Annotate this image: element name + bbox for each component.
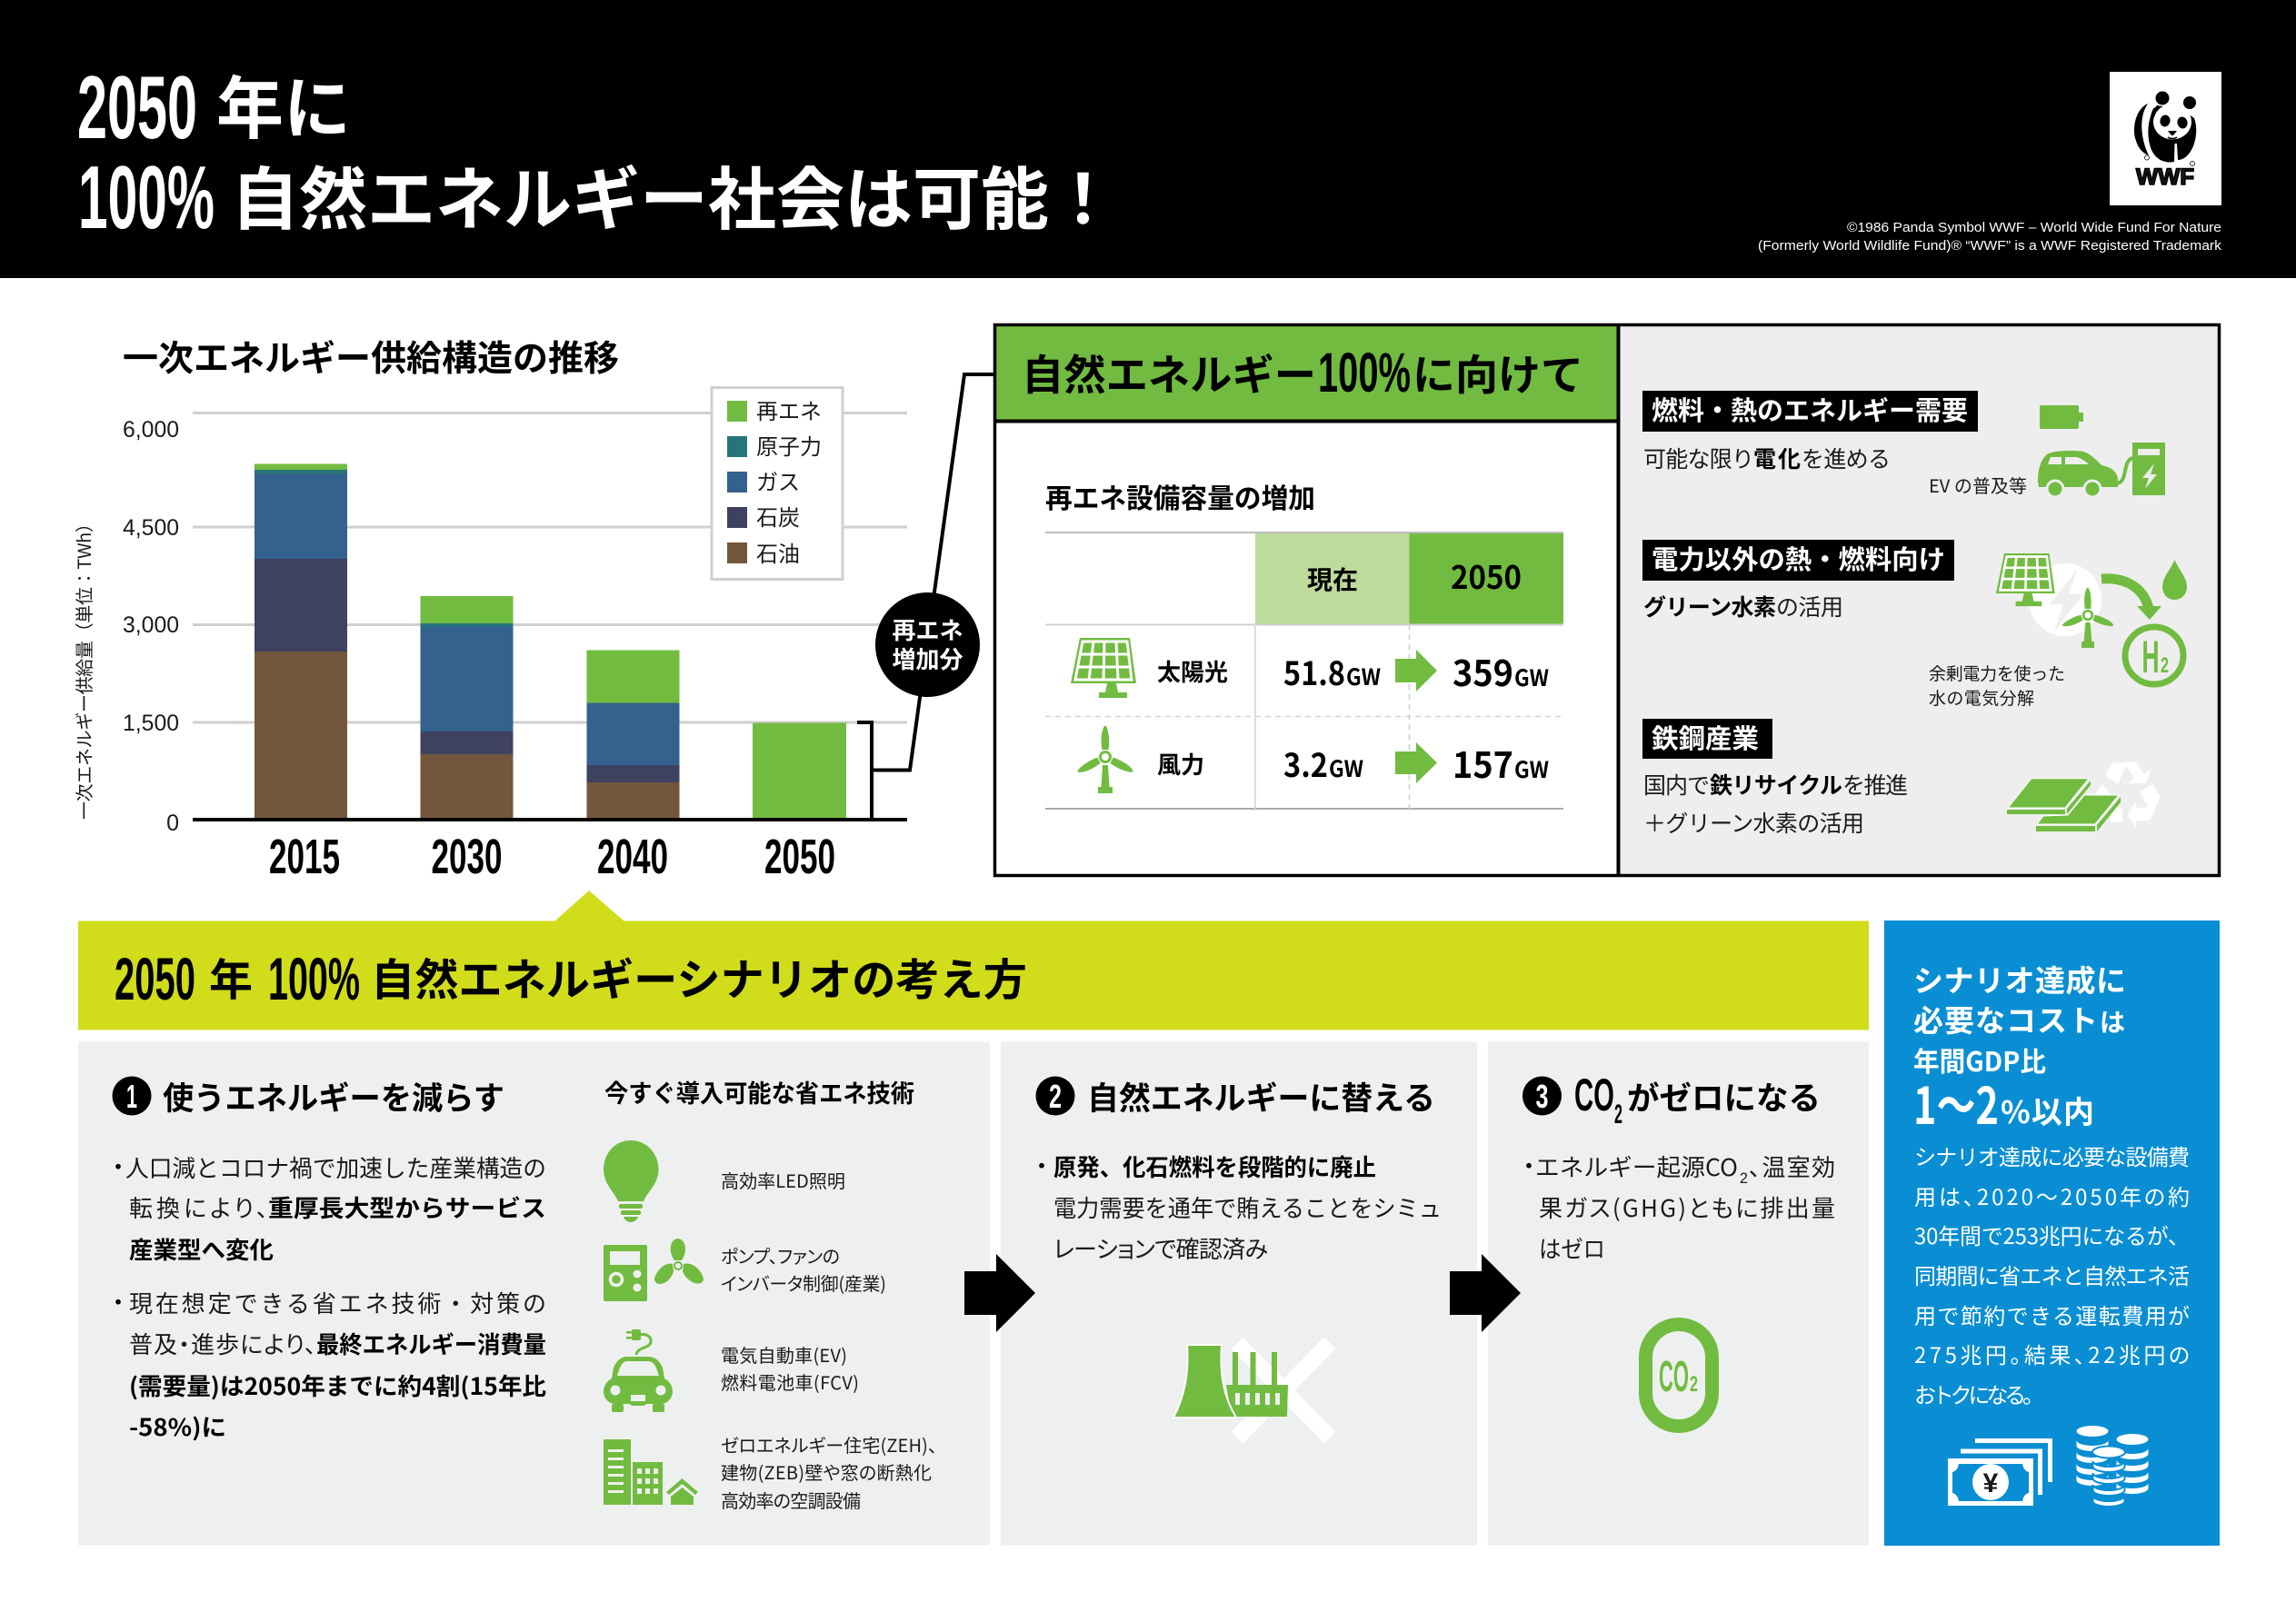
- icon: coin stacks: [2076, 1426, 2149, 1507]
- panel 3 body text: 、温室効: [1749, 1149, 1835, 1183]
- cost body text: シナリオ達成に必要な設備費: [1914, 1139, 2190, 1171]
- step number 3: 3: [1536, 1078, 1549, 1115]
- panel heading: [1022, 342, 1583, 403]
- icon: solar panel: [1071, 638, 1136, 698]
- solar current value: GW: [1346, 660, 1381, 692]
- panel 1 body text: 最終エネルギー消費量: [316, 1327, 546, 1360]
- cost heading: は: [2100, 1003, 2125, 1040]
- section: fuel and heat: EV の普及等: [1929, 472, 2027, 498]
- cost heading: 年間GDP比: [1913, 1040, 2046, 1080]
- WWF wordmark: WWF: [2136, 164, 2194, 190]
- solar 2050 value: GW: [1514, 661, 1549, 693]
- band heading: [115, 944, 1027, 1012]
- panel 2 body text: 電力需要を通年で賄えることをシミュ: [1053, 1190, 1442, 1224]
- legend: [712, 387, 843, 580]
- bar 2030: [420, 596, 513, 820]
- copyright notice: (Formerly World Wildlife Fund)® “WWF” is a WWF Registered Trademark: [1758, 239, 2222, 254]
- panel 3 heading: 2: [1614, 1100, 1622, 1129]
- panel 3 body text: エネルギー起源CO: [1535, 1149, 1738, 1183]
- solar 2050 value: [1452, 646, 1549, 697]
- icon: LED bulb: [604, 1140, 658, 1222]
- section: non-electric heat and fuel: 水の電気分解: [1929, 685, 2034, 710]
- panel 3 heading: CO: [1574, 1070, 1614, 1120]
- copyright notice: ©1986 Panda Symbol WWF – World Wide Fund For Nature: [1847, 221, 2221, 235]
- panel: cost callout: [1884, 920, 2220, 1546]
- panel heading: に向けて: [1413, 343, 1583, 403]
- solar 2050 value: 359: [1452, 646, 1513, 697]
- panel 3 body text: ・: [1519, 1155, 1539, 1178]
- bar 2015: [255, 463, 347, 820]
- icon: electrolysis of water: [1996, 553, 2187, 684]
- panel 3 body text: 2: [1740, 1169, 1748, 1187]
- pump and fan label: ポンプ、ファンの: [721, 1242, 840, 1269]
- panel 3 heading: [1574, 1070, 1821, 1129]
- x axis years: [269, 830, 835, 884]
- header band: [0, 0, 2296, 278]
- section: non-electric heat and fuel: の活用: [1776, 590, 1843, 622]
- column headers: 現在: [1307, 561, 1358, 597]
- legend: 原子力: [756, 429, 822, 461]
- cost body text: 用で節約できる運転費用が: [1914, 1299, 2190, 1330]
- panel 1 body text: ・: [108, 1156, 128, 1179]
- y axis labels: 3,000: [123, 612, 179, 638]
- y axis labels: 0: [166, 811, 179, 836]
- section: fuel and heat: 可能な限り: [1643, 442, 1754, 474]
- WWF logo: [2110, 72, 2221, 205]
- chart heading: 一次エネルギー供給構造の推移: [123, 331, 619, 382]
- capacity table: 2050: [1451, 552, 1522, 599]
- y axis labels: 1,500: [123, 711, 179, 736]
- scenario band: [78, 891, 1869, 1030]
- panel 1 body text: 転換により、: [129, 1190, 268, 1224]
- stacked bar chart: [70, 387, 907, 884]
- icon: battery and EV charger: [2038, 405, 2165, 497]
- solar label: 太陽光: [1157, 654, 1228, 688]
- buildings label: 建物(ZEB)壁や窓の断熱化: [721, 1458, 932, 1485]
- title: 年に: [216, 54, 351, 153]
- connector bracket line: [857, 374, 994, 820]
- step number 2: [1036, 1076, 1074, 1116]
- cost body text: 30年間で253兆円になるが、: [1914, 1219, 2190, 1250]
- panel 2 body text: 原発、化石燃料を段階的に廃止: [1053, 1149, 1376, 1183]
- panel 1 body text: 産業型へ変化: [129, 1232, 274, 1266]
- callout: renewable increase: 増加分: [892, 642, 963, 675]
- panel 1: reduce energy: [78, 1041, 990, 1545]
- icon: CO2 ring: [1645, 1325, 1712, 1427]
- band heading: 100%: [268, 945, 360, 1012]
- section: steel industry: 鉄リサイクル: [1710, 768, 1842, 801]
- band heading: 自然エネルギーシナリオの考え方: [371, 944, 1027, 1008]
- panel 2 body text: ・: [1032, 1155, 1052, 1178]
- LED label: 高効率LED照明: [721, 1167, 845, 1193]
- panel 1 body text: 現在想定できる省エネ技術・対策の: [129, 1286, 546, 1319]
- x axis years: 2050: [764, 830, 835, 884]
- EV label: 電気自動車(EV): [721, 1341, 847, 1368]
- wind current value: 3.2: [1283, 740, 1328, 787]
- cost heading: %以内: [2001, 1088, 2094, 1132]
- pump and fan label: [721, 1242, 886, 1296]
- capacity table: [1045, 532, 1563, 809]
- EV label: [721, 1341, 859, 1395]
- section: fuel and heat: を進める: [1802, 442, 1891, 474]
- y axis labels: 6,000: [123, 417, 179, 443]
- band heading: 年: [209, 944, 253, 1008]
- capacity table heading: 再エネ設備容量の増加: [1045, 476, 1315, 516]
- legend: ガス: [756, 464, 800, 496]
- panel 3 heading: がゼロになる: [1627, 1073, 1821, 1119]
- panel 2 body text: [1032, 1149, 1442, 1265]
- bar 2040: [587, 651, 680, 820]
- wind 2050 value: [1452, 738, 1549, 789]
- pump and fan label: インバータ制御(産業): [721, 1269, 886, 1296]
- solar current value: 51.8: [1283, 648, 1345, 695]
- technology sub-heading: 今すぐ導入可能な省エネ技術: [604, 1074, 914, 1110]
- section: fuel and heat: [1642, 390, 2165, 498]
- callout: renewable increase: 再エネ: [892, 612, 963, 646]
- arrow: panel 2 to panel 3: [1450, 1254, 1521, 1332]
- wind 2050 value: GW: [1514, 752, 1549, 785]
- icon: electric car: [604, 1329, 673, 1412]
- section: fuel and heat: 電化: [1753, 442, 1801, 474]
- legend: 石炭: [756, 500, 800, 532]
- y axis title: 一次エネルギー供給量（単位：TWh）: [70, 514, 96, 820]
- arrow: panel 1 to panel 2: [964, 1254, 1035, 1332]
- cost body text: 275兆円。結果、22兆円の: [1914, 1338, 2190, 1369]
- cost heading: 1～2: [1913, 1066, 1999, 1139]
- panel 3 body text: はゼロ: [1539, 1231, 1605, 1265]
- section: non-electric heat and fuel: [1642, 539, 2187, 710]
- panel heading: 100%: [1318, 342, 1411, 403]
- icon: power plant crossed out: [1173, 1343, 1330, 1438]
- callout: renewable increase: [875, 592, 980, 697]
- cost heading: [1913, 957, 2126, 1139]
- step number 1: [113, 1076, 151, 1116]
- panel heading: 自然エネルギー: [1022, 343, 1316, 403]
- title: 2050: [77, 57, 197, 157]
- icon: buildings: [604, 1439, 698, 1505]
- buildings label: [721, 1431, 937, 1513]
- copyright notice: [1758, 221, 2222, 254]
- icon: yen banknotes: ¥: [1983, 1468, 1999, 1498]
- icon: CO2 ring: CO: [1659, 1353, 1689, 1401]
- x axis years: 2015: [269, 830, 340, 884]
- band heading: 2050: [115, 945, 195, 1012]
- icon: electrolysis of water: H: [2141, 632, 2160, 682]
- x axis years: 2040: [597, 830, 668, 884]
- step number 2: 2: [1049, 1078, 1062, 1115]
- section: fuel and heat: 燃料・熱のエネルギー需要: [1652, 390, 1968, 428]
- wind current value: GW: [1329, 751, 1363, 784]
- step number 1: 1: [126, 1078, 137, 1115]
- panel 2 heading: 自然エネルギーに替える: [1087, 1073, 1435, 1119]
- cost body text: 用は、2020～2050年の約: [1914, 1179, 2190, 1211]
- section: steel industry: [1642, 718, 2161, 839]
- wind current value: [1283, 740, 1363, 787]
- section: steel industry: 鉄鋼産業: [1652, 718, 1759, 756]
- panel 1 body text: 重厚長大型からサービス: [268, 1190, 546, 1224]
- legend: 石油: [756, 536, 800, 568]
- panel 3 body text: [1519, 1149, 1835, 1265]
- cost heading: 必要なコスト: [1913, 997, 2098, 1040]
- section: non-electric heat and fuel: 余剰電力を使った: [1929, 661, 2065, 685]
- bar 2050: [753, 723, 846, 820]
- buildings label: 高効率の空調設備: [721, 1487, 861, 1513]
- EV label: 燃料電池車(FCV): [721, 1368, 859, 1395]
- panel 2: switch to renewables: [1001, 1041, 1477, 1545]
- wind label: 風力: [1157, 747, 1204, 781]
- section: steel industry: 国内で: [1643, 768, 1710, 801]
- arrow: [1395, 650, 1437, 692]
- panel 2 body text: レーションで確認済み: [1053, 1231, 1268, 1265]
- icon: wind turbine: [1076, 726, 1134, 793]
- panel 1 body text: ・: [108, 1291, 128, 1314]
- icon: recycled steel plates: [2007, 761, 2161, 831]
- title: [77, 54, 1117, 247]
- section: steel industry: を推進: [1842, 768, 1908, 801]
- icon: electrolysis of water: 2: [2161, 653, 2169, 678]
- arrow: [1395, 742, 1437, 783]
- icon: pump and fan: [604, 1239, 704, 1301]
- cost heading: シナリオ達成に: [1913, 957, 2126, 1000]
- step number 3: [1522, 1076, 1562, 1116]
- panel: towards 100% renewable: [78, 323, 2220, 1546]
- panel 1 body text: [108, 1150, 546, 1443]
- wind 2050 value: 157: [1452, 738, 1513, 789]
- y axis labels: [123, 417, 179, 836]
- panel 1 body text: 人口減とコロナ禍で加速した産業構造の: [125, 1150, 546, 1184]
- title: 100%: [78, 147, 215, 247]
- panel 1 body text: -58%)に: [129, 1409, 226, 1443]
- legend: 再エネ: [756, 393, 822, 425]
- section: non-electric heat and fuel: グリーン水素: [1643, 590, 1776, 622]
- panel 1 heading: 使うエネルギーを減らす: [163, 1073, 504, 1119]
- panel 3: CO2 zero: [1488, 1041, 1869, 1545]
- panel 3 body text: 果ガス(GHG)ともに排出量: [1539, 1190, 1835, 1224]
- icon: CO2 ring: 2: [1690, 1372, 1698, 1397]
- panel 1 body text: 普及・進歩により、: [129, 1327, 316, 1360]
- cost body text: 同期間に省エネと自然エネ活: [1914, 1259, 2190, 1290]
- buildings label: ゼロエネルギー住宅(ZEH)、: [721, 1431, 937, 1458]
- x axis years: 2030: [431, 830, 502, 884]
- section: steel industry: ＋グリーン水素の活用: [1643, 806, 1864, 839]
- y axis labels: 4,500: [123, 515, 179, 541]
- title: 自然エネルギー社会は可能！: [231, 144, 1117, 244]
- cost body text: [1914, 1139, 2190, 1409]
- icon: yen banknotes: [1948, 1438, 2052, 1506]
- cost body text: おトクになる。: [1914, 1378, 2044, 1409]
- section: non-electric heat and fuel: 電力以外の熱・燃料向け: [1652, 539, 1945, 577]
- panel 1 body text: (需要量)は2050年までに約4割(15年比: [129, 1368, 546, 1402]
